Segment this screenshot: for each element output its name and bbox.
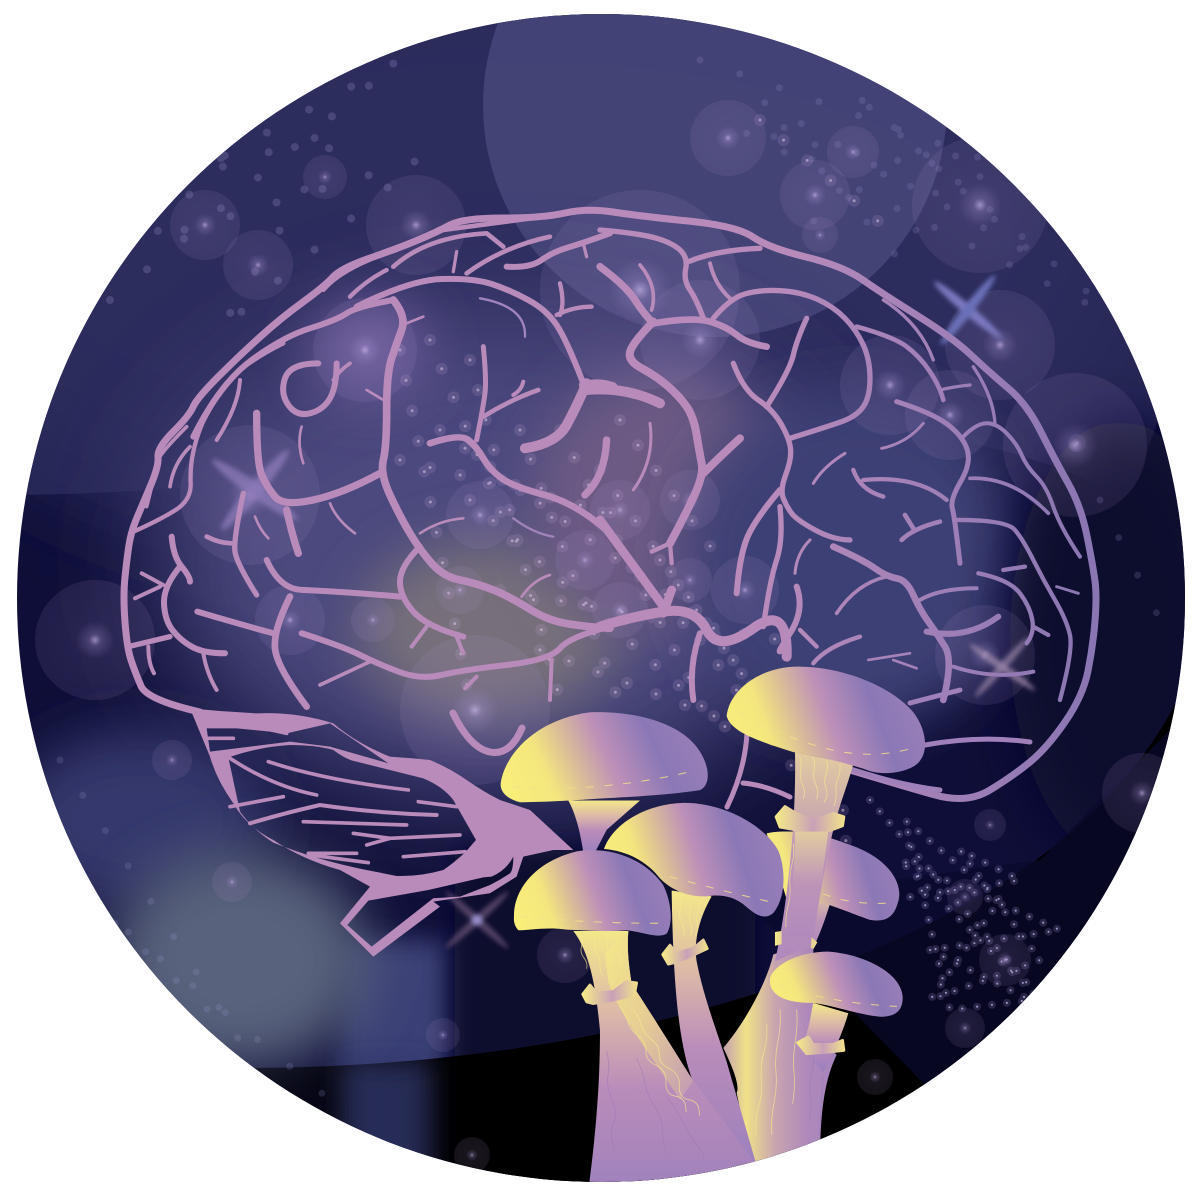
mushroom stem: center xyxy=(672,890,757,1166)
icon: sparkle star lower xyxy=(443,889,511,951)
icon: sparkle star upper right xyxy=(931,272,1005,348)
brain lower folds near mushrooms xyxy=(453,690,1030,807)
mushroom stems: right base xyxy=(723,946,837,1162)
mushroom ring: tall stem xyxy=(776,806,844,831)
brain right hemisphere folds xyxy=(587,230,1080,700)
brain illustration xyxy=(124,210,1096,957)
icon: sparkle star right xyxy=(967,635,1037,699)
mushroom stem: back right xyxy=(814,902,830,942)
icon: sparkle star left xyxy=(208,446,302,534)
mushroom ring: center stem xyxy=(663,940,707,964)
mushroom cap: lower left xyxy=(514,850,671,936)
mushroom stem: upper left xyxy=(568,801,640,852)
mushroom cap: top left xyxy=(501,712,708,802)
mushroom cap: top right xyxy=(727,667,925,773)
mushroom stem: tall right xyxy=(775,752,853,961)
mushroom stem: left xyxy=(573,931,757,1196)
mushroom ring: right lower xyxy=(775,931,817,949)
mushroom stem: left light stream xyxy=(605,931,693,1100)
mushroom cap: middle xyxy=(604,803,784,917)
brain outer contour xyxy=(124,210,1096,799)
mushroom stem overlap: tall stem over back cap xyxy=(787,832,828,937)
cerebellum and brainstem xyxy=(190,708,573,957)
mushroom cap: small right xyxy=(770,952,903,1017)
mushroom ring: left stem xyxy=(583,981,637,1004)
cap rim stitching xyxy=(512,712,917,1006)
mushroom stem: small right xyxy=(806,1003,848,1072)
stem gill lines xyxy=(580,757,840,1162)
brain left hemisphere folds xyxy=(128,217,613,707)
mushroom ring: small right xyxy=(798,1037,844,1054)
mushroom cap: back right xyxy=(767,831,899,921)
mushroom cluster xyxy=(501,667,925,1196)
